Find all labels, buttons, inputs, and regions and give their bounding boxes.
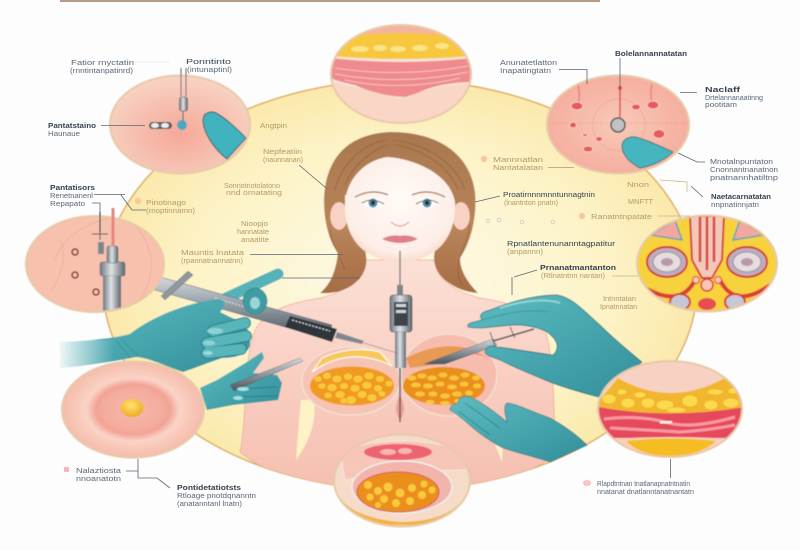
labels: right side callouts: nnpnatinnjatn — [711, 202, 759, 209]
panel: lower right inset — [598, 361, 745, 460]
labels: tan text in central circle, left: Angtpin — [260, 123, 287, 130]
labels: lower left callouts: Nalaztiosta — [76, 468, 121, 475]
labels: lower right callouts — [584, 459, 694, 496]
icon: large right glove — [468, 295, 642, 397]
nose — [391, 222, 409, 226]
labels: tan text in central circle, left: (rnoptinnamn) — [146, 208, 195, 215]
labels: tan text in central circle, left: (naunnanan) — [263, 157, 303, 164]
arm gap right — [494, 440, 503, 462]
labels: upper right callouts: Anunatetlatton — [500, 60, 557, 67]
labels: tan text in central circle, right: Mannnatlan — [493, 157, 543, 164]
panel: mid left inset — [26, 208, 164, 312]
icon: small left gloved hand with pen — [200, 352, 303, 410]
labels: lower left callouts — [64, 459, 256, 508]
panel: central yellow circle — [103, 80, 697, 490]
panel: top right inset — [547, 76, 689, 174]
labels: tan text in central circle, left: (rpannatnannatnn) — [181, 258, 243, 265]
labels: lower right callouts: nnatanat dnatlanntanatnantatn — [597, 489, 694, 496]
icon: red needle — [112, 208, 114, 246]
left cross-section with fat — [302, 347, 400, 415]
hair strands — [330, 140, 470, 285]
labels: tan text in central circle, right: MNFTT — [628, 199, 654, 206]
labels: lower right callouts: Rlapdtntnan tnatlanapnatntnatin — [597, 481, 690, 488]
labels: upper left callouts: (intunaptinl) — [187, 67, 232, 74]
labels: mid left callouts: Pantatisors — [50, 185, 95, 192]
labels: centre right callouts: (Rtlnatntnn nantan) — [541, 273, 605, 280]
labels: right side callouts: Cnonnantnanatnon — [710, 167, 778, 174]
labels: centre right callouts: Intnntatan — [603, 296, 636, 303]
labels: mid left callouts: Repapato — [50, 201, 85, 208]
labels: upper right callouts: Drtelannanaatinng — [705, 95, 763, 102]
arm gap left — [296, 400, 315, 460]
labels: centre right callouts: Ipnatnnatan — [600, 304, 637, 311]
panel: lower left inset — [62, 362, 204, 458]
icon: upper finger of left glove — [222, 274, 278, 300]
labels: centre right callouts: (lnantnton pnatn) — [504, 200, 558, 207]
labels: tan text in central circle, right: Ranatntnpatate — [591, 214, 652, 221]
labels: right side callouts — [691, 159, 778, 209]
icon: right small syringe — [424, 327, 534, 364]
icon: lower right glove — [450, 396, 587, 462]
labels: centre right callouts: Prnanatmantanton — [540, 265, 616, 272]
labels: upper left callouts — [48, 59, 232, 138]
labels: lower left callouts: nnoanatotn — [76, 476, 121, 483]
labels: upper left callouts: Pantatstaino — [48, 123, 96, 130]
labels: upper left callouts: Haunaue — [48, 131, 80, 138]
icon: probe dot — [611, 86, 625, 132]
labels: upper right callouts: pootitam — [705, 102, 737, 109]
labels: tan text in central circle, left: Sonnotnotolatono — [224, 183, 280, 190]
breast cross-sections — [302, 334, 497, 420]
icon: large diagonal syringe — [155, 271, 397, 353]
icon: injection markers — [72, 212, 108, 295]
labels: tan text in central circle, left: Nioopjo — [241, 221, 268, 228]
labels: right side callouts: Mnotalnpuntaton — [710, 159, 773, 166]
face — [345, 157, 455, 262]
labels: centre right callouts: Rpnatlantenunanntagpatitur — [507, 241, 616, 248]
centre cleft — [396, 395, 404, 420]
labels: upper left callouts: Fatior rnyctatin — [71, 60, 134, 67]
labels: lower left callouts: Rtloage pnotdqnanntn — [177, 493, 256, 500]
labels: mid left callouts — [50, 185, 146, 232]
icon: central vertical syringe — [390, 251, 412, 422]
labels: tan text in central circle, right: Nnon — [627, 182, 649, 189]
labels: centre right callouts: Proatirnnnmnntunnagtnin — [503, 192, 595, 199]
labels: tan text in central circle, left: Mauntis lnatata — [181, 250, 244, 257]
labels: right side callouts: pnatnannhatiltnp — [710, 175, 778, 182]
labels: upper left callouts: (rnntintanpatinrd) — [70, 68, 133, 75]
hair — [320, 132, 478, 293]
labels: upper left callouts: Ponntinto — [186, 59, 231, 66]
figure: woman with shoulders and torso — [240, 132, 556, 490]
panel: top left inset — [110, 68, 250, 174]
ears — [330, 202, 470, 230]
panel: mid right inset — [637, 216, 777, 312]
labels: tan text in central circle, right — [481, 156, 690, 221]
mouth — [382, 235, 418, 243]
labels: upper right callouts — [500, 51, 763, 162]
eyes — [355, 192, 445, 208]
panel: bottom centre inset — [334, 434, 470, 526]
labels: tan text in central circle, right: Nantatalatan — [493, 165, 543, 172]
right cross-section with fat — [401, 334, 497, 416]
labels: tan text in central circle, left: hannatate — [237, 229, 269, 236]
icon: left forearm and glove — [55, 288, 267, 372]
torso and arms — [240, 260, 556, 490]
labels: centre right callouts: (anpannn) — [507, 249, 543, 256]
labels: lower left callouts: Pontidetatiotsts — [177, 485, 241, 492]
icon: needle — [149, 68, 188, 130]
labels: tan text in central circle, left: Pinotinago — [146, 200, 186, 207]
top edge strip — [60, 0, 600, 2]
labels: upper right callouts: Bolelannannatatan — [615, 51, 687, 58]
labels: right side callouts: Naetacarnatatan — [711, 194, 771, 201]
labels: tan text in central circle, left — [135, 123, 360, 278]
labels: tan text in central circle, left: Nepfeatiin — [263, 149, 302, 156]
labels: mid left callouts: Renetnanenl — [50, 193, 93, 200]
labels: centre right callouts — [475, 192, 638, 311]
labels: lower left callouts: (anatanntanl lnatn) — [177, 501, 242, 508]
panel: top centre inset — [330, 25, 472, 125]
labels: upper right callouts: Naclaff — [705, 87, 741, 94]
labels: tan text in central circle, left: nnd ornatating — [226, 190, 282, 197]
labels: tan text in central circle, left: anaatite — [241, 237, 269, 244]
icon: fat nodule — [120, 399, 144, 417]
labels: upper right callouts: Inapatingtatn — [500, 68, 551, 75]
